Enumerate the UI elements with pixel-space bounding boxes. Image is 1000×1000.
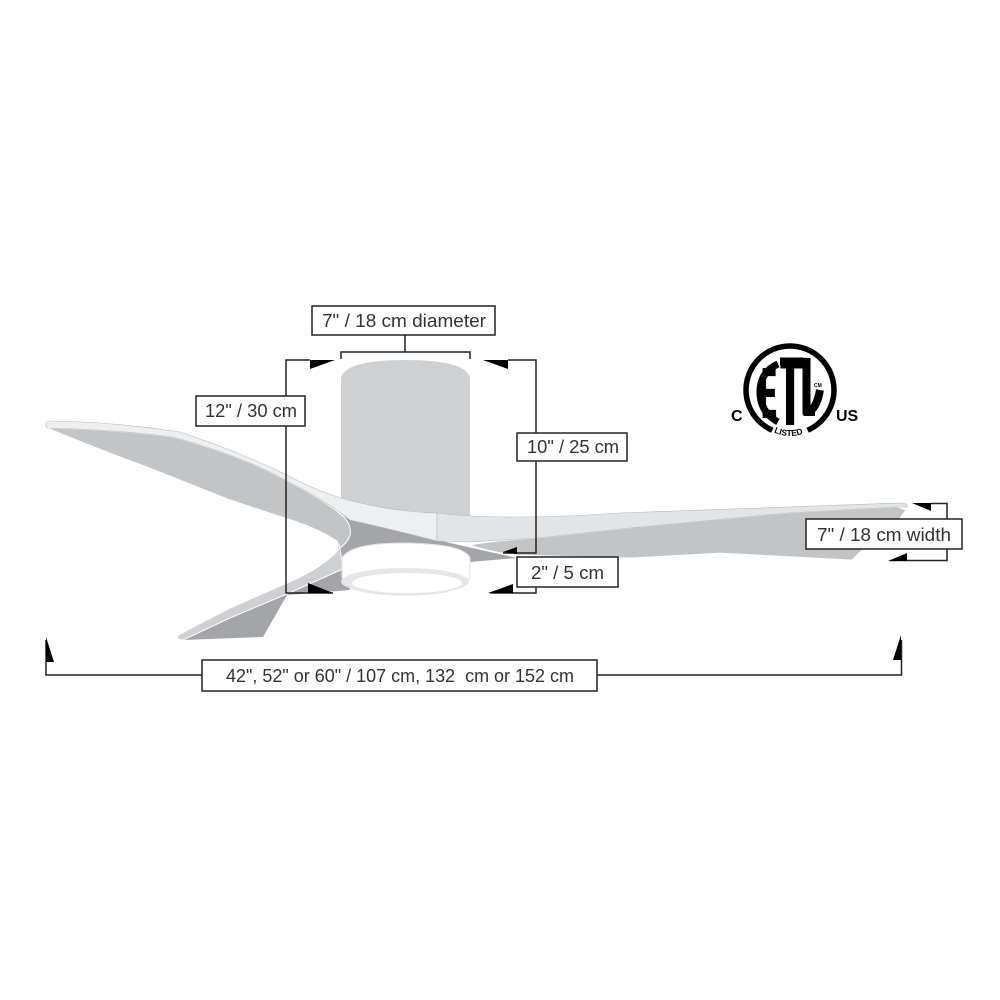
- label: canopy diameter: 7" / 18 cm diameter: [322, 311, 486, 331]
- dimension lines: [46, 335, 947, 675]
- lower blade underside: [183, 568, 350, 640]
- upper left blade: [46, 421, 437, 548]
- label: 2 inch light height: 2" / 5 cm: [531, 563, 604, 583]
- ceiling fan illustration: [46, 360, 907, 640]
- label: 12 inch height: 12" / 30 cm: [205, 401, 297, 421]
- right blade top strip: [437, 503, 907, 542]
- label: fan span: [202, 660, 597, 691]
- listed banner: [772, 431, 808, 436]
- ETL letters: E: [761, 354, 777, 434]
- ETL letters: [761, 337, 816, 446]
- outer ring: [746, 346, 834, 434]
- light ring: [341, 568, 469, 595]
- light lens: [352, 573, 462, 593]
- E curved stem: [760, 364, 778, 422]
- label: 10 inch height: [517, 433, 627, 461]
- US mark: US: [836, 408, 859, 425]
- ETL letters: T: [780, 337, 803, 446]
- label: 10 inch height: 10" / 25 cm: [527, 437, 619, 457]
- label: 12 inch height: [196, 396, 305, 426]
- label: 2 inch light height: [517, 557, 618, 587]
- motor body: [342, 543, 470, 595]
- hub shadow: [336, 515, 517, 575]
- ETL listed mark: LISTED: [774, 427, 802, 436]
- ETL listed mark: [731, 337, 859, 446]
- ETL letters: L: [802, 341, 816, 435]
- right blade underside: [470, 507, 906, 560]
- label: fan span: 42", 52" or 60" / 107 cm, 132 cm or 152 cm: [226, 666, 574, 686]
- label: blade width: 7" / 18 cm width: [817, 525, 951, 545]
- lower left blade: [178, 548, 350, 640]
- cm mark: CM: [814, 383, 822, 389]
- fan downrod canister: [341, 360, 470, 520]
- C mark: C: [731, 408, 743, 425]
- label: canopy diameter: [312, 306, 495, 335]
- upper left blade underside: [47, 428, 350, 548]
- label: blade width: [806, 519, 962, 549]
- lower blade top: [178, 548, 343, 640]
- dimension arrowheads: [46, 360, 931, 662]
- upper left blade top strip: [46, 421, 437, 541]
- right blade: [437, 503, 907, 560]
- motor housing with light: [341, 543, 470, 595]
- T and L heavy strokes: [780, 358, 820, 425]
